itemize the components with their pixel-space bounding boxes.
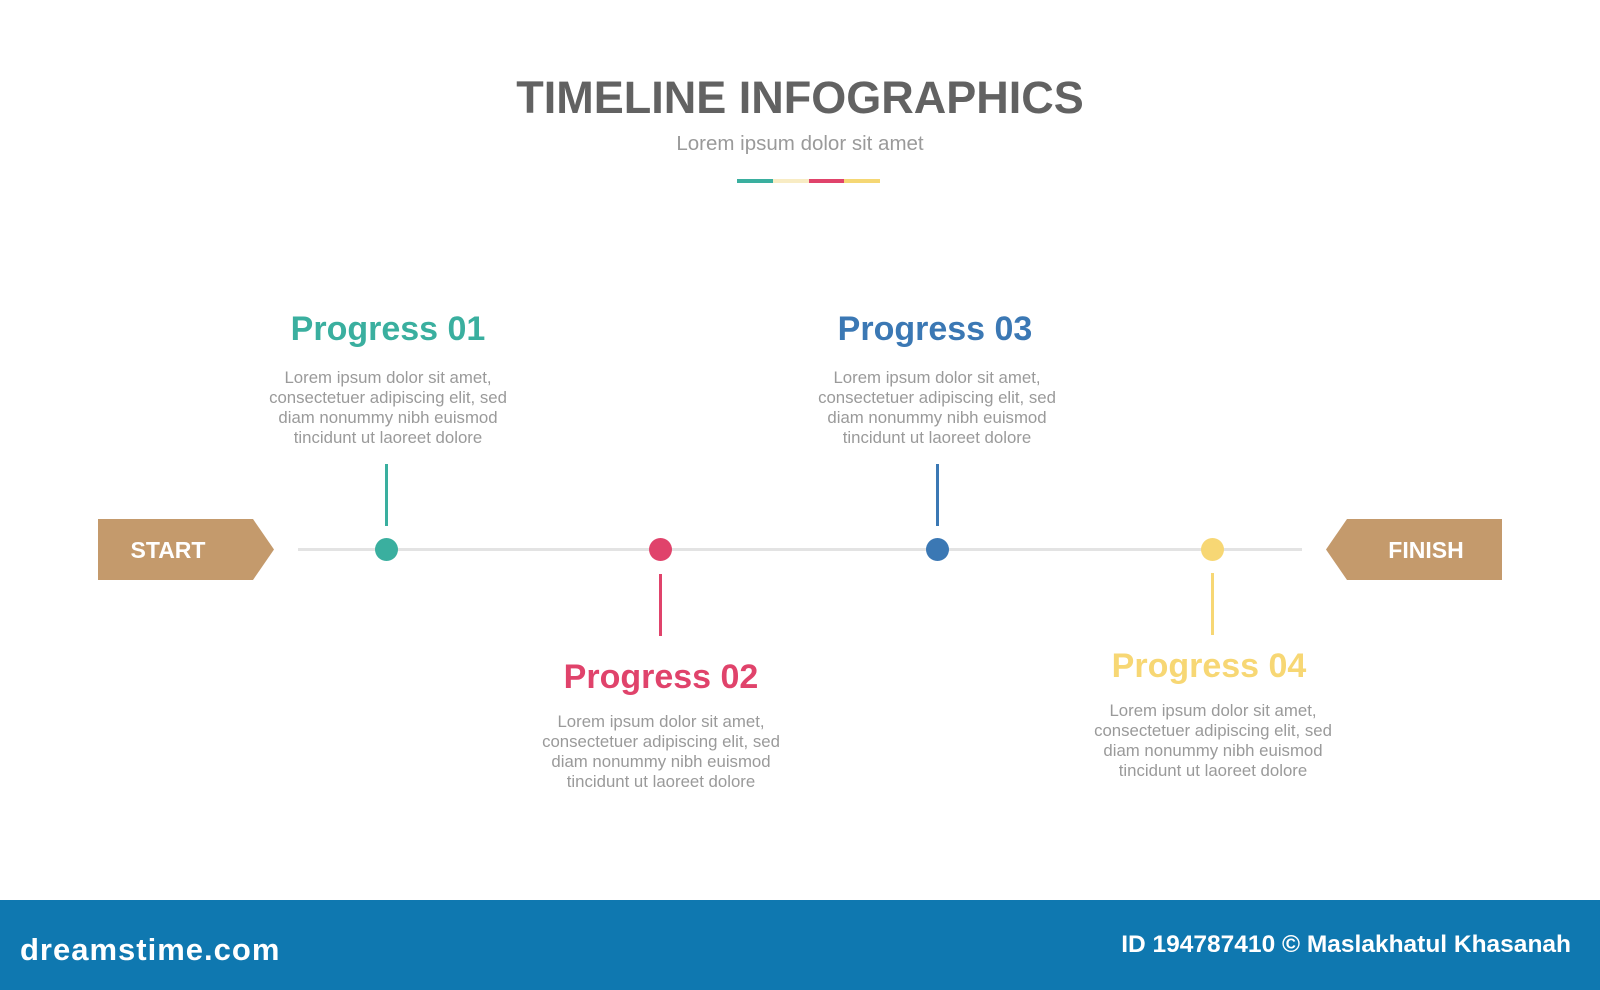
heading: Progress 04 bbox=[1112, 647, 1306, 685]
text: Lorem ipsum dolor sit amet, bbox=[284, 368, 492, 387]
text bbox=[1094, 701, 1332, 780]
footer credit: ID 194787410 © Maslakhatul Khasanah bbox=[1121, 931, 1571, 958]
title: TIMELINE INFOGRAPHICS bbox=[516, 72, 1084, 123]
subtitle: Lorem ipsum dolor sit amet bbox=[676, 132, 924, 155]
text bbox=[818, 368, 1056, 447]
start tag bbox=[98, 519, 274, 580]
finish tag bbox=[1326, 519, 1502, 580]
text: diam nonummy nibh euismod bbox=[551, 752, 771, 771]
text bbox=[542, 712, 780, 791]
text: diam nonummy nibh euismod bbox=[827, 408, 1047, 427]
text: consectetuer adipiscing elit, sed bbox=[818, 388, 1056, 407]
text bbox=[269, 368, 507, 447]
text: tincidunt ut laoreet dolore bbox=[294, 428, 482, 447]
dot bbox=[926, 538, 949, 561]
color bar bbox=[737, 179, 880, 183]
heading: Progress 03 bbox=[838, 310, 1032, 348]
text: tincidunt ut laoreet dolore bbox=[843, 428, 1031, 447]
connector bbox=[659, 574, 662, 636]
footer bar bbox=[0, 900, 1600, 990]
finish tag: FINISH bbox=[1388, 537, 1464, 563]
text: diam nonummy nibh euismod bbox=[1103, 741, 1323, 760]
heading: Progress 02 bbox=[564, 658, 758, 696]
connector bbox=[1211, 573, 1214, 635]
text: Lorem ipsum dolor sit amet, bbox=[557, 712, 765, 731]
text: consectetuer adipiscing elit, sed bbox=[542, 732, 780, 751]
connector bbox=[936, 464, 939, 526]
text: consectetuer adipiscing elit, sed bbox=[1094, 721, 1332, 740]
heading: Progress 01 bbox=[291, 310, 485, 348]
progress 01 bbox=[269, 310, 507, 561]
dot bbox=[375, 538, 398, 561]
timeline line bbox=[298, 548, 1302, 551]
text: diam nonummy nibh euismod bbox=[278, 408, 498, 427]
text: tincidunt ut laoreet dolore bbox=[567, 772, 755, 791]
start tag: START bbox=[131, 537, 205, 563]
progress 03 bbox=[818, 310, 1056, 561]
progress 02 bbox=[542, 538, 780, 791]
text: consectetuer adipiscing elit, sed bbox=[269, 388, 507, 407]
footer logo: dreamstime.com bbox=[20, 932, 280, 967]
text: Lorem ipsum dolor sit amet, bbox=[1109, 701, 1317, 720]
text: Lorem ipsum dolor sit amet, bbox=[833, 368, 1041, 387]
text: tincidunt ut laoreet dolore bbox=[1119, 761, 1307, 780]
progress 04 bbox=[1094, 538, 1332, 780]
connector bbox=[385, 464, 388, 526]
dot bbox=[649, 538, 672, 561]
dot bbox=[1201, 538, 1224, 561]
